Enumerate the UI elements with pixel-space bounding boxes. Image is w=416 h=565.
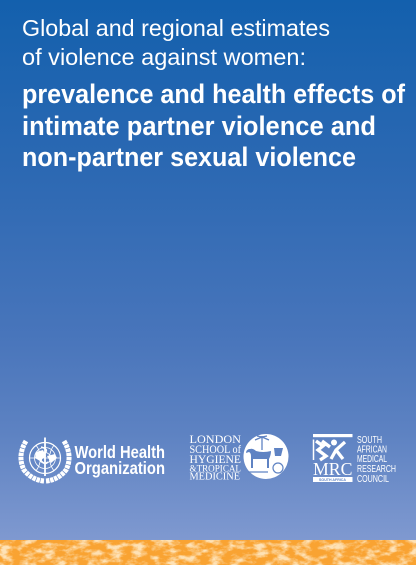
icon: crest with horse and chariot	[244, 434, 288, 479]
orange textured band	[0, 540, 416, 565]
organisation name	[190, 434, 242, 482]
organisation name	[357, 434, 396, 485]
logo: World Health Organization	[21, 438, 165, 481]
organisation name: MEDICINE	[190, 472, 240, 482]
logo: London School of Hygiene & Tropical Medicine	[190, 434, 288, 482]
organisation name: SOUTH	[357, 434, 382, 446]
title: of violence against women:	[22, 44, 306, 70]
organisation name: SCHOOL of	[190, 444, 241, 456]
title	[22, 15, 405, 172]
organisation name: AFRICAN	[357, 444, 387, 456]
title: prevalence and health effects of	[22, 79, 405, 109]
logo: South African Medical Research Council	[313, 434, 396, 485]
organisation name: World Health	[74, 442, 165, 462]
logo: World Health Organization: Organization	[74, 458, 165, 478]
icon: MRC emblem: SOUTH AFRICA	[319, 478, 346, 482]
title: intimate partner violence and	[22, 111, 376, 141]
icon: MRC emblem: MRC	[313, 459, 352, 479]
organisation name: LONDON	[190, 434, 242, 446]
organisation name: HYGIENE	[190, 454, 241, 466]
organisation name: COUNCIL	[357, 473, 389, 485]
icon: MRC emblem	[313, 434, 352, 482]
title: Global and regional estimates	[22, 15, 330, 41]
icon: WHO emblem	[21, 438, 69, 481]
organisation name: RESEARCH	[357, 463, 396, 475]
organisation name: &TROPICAL	[190, 464, 241, 474]
organisation name: MEDICAL	[357, 453, 387, 465]
title: non-partner sexual violence	[22, 142, 356, 172]
